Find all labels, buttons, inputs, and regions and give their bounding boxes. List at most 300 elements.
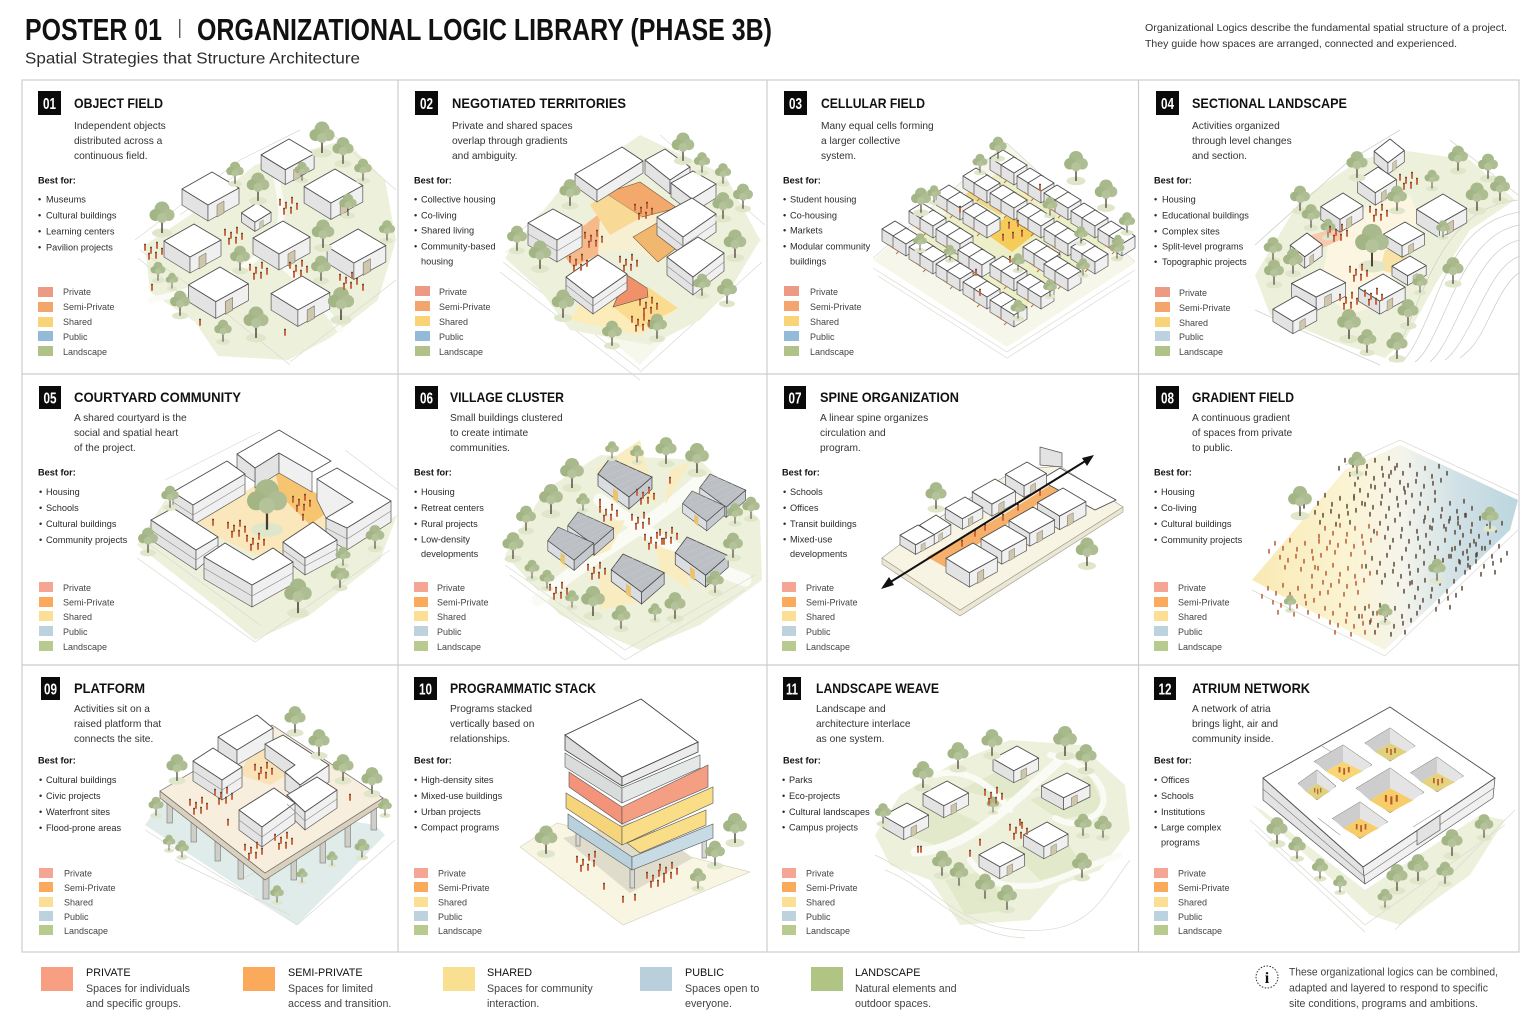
best for list: • bbox=[414, 503, 417, 513]
description: Private and shared spaces bbox=[452, 121, 573, 132]
legend: Semi-Private bbox=[437, 598, 489, 608]
panel: 01 object field bbox=[38, 91, 396, 365]
best for list: Best for: bbox=[782, 468, 820, 478]
best for list bbox=[414, 468, 484, 559]
panel: 08 gradient field bbox=[1154, 386, 1518, 656]
description: to public. bbox=[1192, 443, 1233, 454]
legend: Landscape bbox=[438, 926, 482, 936]
best for list: Mixed-use bbox=[790, 534, 832, 544]
description: of spaces from private bbox=[1192, 428, 1293, 439]
note text: These organizational logics can be combined, bbox=[1289, 966, 1498, 978]
legend: Shared bbox=[806, 898, 835, 908]
best for list: Community projects bbox=[1161, 535, 1243, 545]
best for list: • bbox=[39, 823, 42, 833]
best for list: • bbox=[783, 534, 786, 544]
legend: Private bbox=[806, 868, 834, 878]
best for list: Housing bbox=[46, 487, 80, 497]
description bbox=[1192, 121, 1292, 162]
best for list: • bbox=[782, 807, 785, 817]
legend: Private bbox=[64, 868, 92, 878]
legend: Public bbox=[437, 627, 462, 637]
description: Activities sit on a bbox=[74, 704, 150, 715]
bottom legend: landscape: LANDSCAPE bbox=[855, 967, 920, 979]
best for list: • bbox=[39, 807, 42, 817]
best for list: Compact programs bbox=[421, 822, 500, 832]
badge 09: 09 bbox=[44, 682, 57, 698]
legend: Shared bbox=[1179, 318, 1208, 328]
description: and ambiguity. bbox=[452, 151, 518, 162]
best for list: Best for: bbox=[38, 756, 76, 766]
best for list: • bbox=[414, 519, 417, 529]
heading: object field: OBJECT FIELD bbox=[74, 95, 163, 111]
best for list bbox=[38, 468, 128, 545]
description: vertically based on bbox=[450, 719, 534, 730]
best for list: Retreat centers bbox=[421, 503, 484, 513]
legend: Private bbox=[439, 287, 467, 297]
intro text bbox=[1145, 23, 1507, 50]
description: community inside. bbox=[1192, 734, 1274, 745]
intro text: Organizational Logics describe the fundamental spatial structure of a project. bbox=[1145, 23, 1507, 34]
legend: Landscape bbox=[810, 347, 854, 357]
best for list: Best for: bbox=[1154, 468, 1192, 478]
description bbox=[450, 704, 534, 745]
legend: Shared bbox=[439, 317, 468, 327]
legend: Private bbox=[1178, 868, 1206, 878]
legend: Shared bbox=[64, 898, 93, 908]
legend: Public bbox=[1178, 627, 1203, 637]
best for list bbox=[414, 756, 503, 832]
legend: Landscape bbox=[63, 347, 107, 357]
bottom legend: semi-private bbox=[243, 967, 391, 1010]
best for list: • bbox=[1154, 519, 1157, 529]
best for list: Learning centers bbox=[46, 226, 115, 236]
best for list: Modular community bbox=[790, 242, 871, 252]
legend: Landscape bbox=[437, 642, 481, 652]
legend: Semi-Private bbox=[438, 883, 490, 893]
description: relationships. bbox=[450, 734, 510, 745]
heading: spine organization: SPINE ORGANIZATION bbox=[820, 389, 959, 405]
description: Landscape and bbox=[816, 704, 886, 715]
badge 03 bbox=[784, 91, 807, 115]
bottom legend: semi-private: Spaces for limited bbox=[288, 983, 373, 995]
badge 04: 04 bbox=[1161, 96, 1174, 113]
badge 10 bbox=[414, 677, 437, 700]
legend: Semi-Private bbox=[806, 598, 858, 608]
best for list: Best for: bbox=[38, 468, 76, 478]
best for list bbox=[783, 176, 871, 266]
best for list: Co-housing bbox=[790, 210, 837, 220]
best for list: Student housing bbox=[790, 194, 856, 204]
intro text: They guide how spaces are arranged, connected and experienced. bbox=[1145, 39, 1457, 50]
best for list: Parks bbox=[789, 775, 813, 785]
description: of the project. bbox=[74, 443, 136, 454]
description bbox=[74, 704, 161, 745]
legend: Landscape bbox=[1179, 347, 1223, 357]
best for list: • bbox=[1154, 791, 1157, 801]
legend: Private bbox=[1178, 583, 1206, 593]
legend bbox=[782, 582, 858, 652]
legend: Landscape bbox=[439, 347, 483, 357]
best for list: Cultural landscapes bbox=[789, 807, 870, 817]
badge 10: 10 bbox=[419, 682, 432, 698]
description: brings light, air and bbox=[1192, 719, 1278, 730]
description: Many equal cells forming bbox=[821, 121, 934, 132]
description: Programs stacked bbox=[450, 704, 532, 715]
legend bbox=[784, 286, 862, 357]
legend: Shared bbox=[63, 317, 92, 327]
icon: info: i bbox=[1265, 970, 1270, 987]
description: through level changes bbox=[1192, 136, 1292, 147]
legend: Semi-Private bbox=[1179, 303, 1231, 313]
panel: 12 atrium network bbox=[1154, 677, 1515, 936]
best for list: Cultural buildings bbox=[46, 775, 117, 785]
best for list: • bbox=[414, 242, 417, 252]
description: to create intimate bbox=[450, 428, 528, 439]
bottom legend: shared: Spaces for community bbox=[487, 983, 593, 995]
illustration: village cluster bbox=[502, 437, 762, 660]
best for list: • bbox=[783, 210, 786, 220]
best for list: Best for: bbox=[1154, 756, 1192, 766]
legend: Semi-Private bbox=[810, 302, 862, 312]
panel: 03 cellular field bbox=[783, 91, 1135, 358]
best for list: Urban projects bbox=[421, 807, 481, 817]
legend bbox=[39, 868, 116, 936]
best for list: Best for: bbox=[414, 468, 452, 478]
legend: Semi-Private bbox=[63, 598, 115, 608]
panel: 04 sectional landscape bbox=[1154, 91, 1520, 365]
heading: atrium network: ATRIUM NETWORK bbox=[1192, 680, 1310, 696]
legend: Private bbox=[810, 287, 838, 297]
best for list bbox=[38, 756, 121, 833]
description: A linear spine organizes bbox=[820, 413, 928, 424]
legend bbox=[414, 868, 490, 936]
best for list: • bbox=[1154, 194, 1157, 204]
best for list: • bbox=[39, 535, 42, 545]
description bbox=[74, 121, 166, 162]
description: Independent objects bbox=[74, 121, 166, 132]
best for list: • bbox=[783, 194, 786, 204]
bottom legend: private: Spaces for individuals bbox=[86, 983, 190, 995]
best for list: • bbox=[1154, 822, 1157, 832]
best for list: Split-level programs bbox=[1162, 242, 1244, 252]
best for list: • bbox=[414, 194, 417, 204]
best for list: Housing bbox=[1161, 487, 1195, 497]
illustration: sectional landscape bbox=[1255, 130, 1520, 365]
description: distributed across a bbox=[74, 136, 163, 147]
legend: Public bbox=[439, 332, 464, 342]
best for list bbox=[782, 468, 857, 559]
legend bbox=[38, 287, 115, 357]
bottom legend: landscape: Natural elements and bbox=[855, 983, 957, 995]
best for list: • bbox=[1154, 226, 1157, 236]
panel: 11 landscape weave bbox=[782, 677, 1130, 938]
legend bbox=[415, 286, 491, 357]
best for list bbox=[782, 756, 870, 832]
legend: Landscape bbox=[1178, 926, 1222, 936]
note text: adapted and layered to respond to specific bbox=[1289, 982, 1489, 994]
description: circulation and bbox=[820, 428, 886, 439]
best for list: • bbox=[782, 775, 785, 785]
best for list: Offices bbox=[790, 503, 819, 513]
badge 12: 12 bbox=[1158, 682, 1172, 698]
description: A shared courtyard is the bbox=[74, 413, 187, 424]
legend: Semi-Private bbox=[1178, 883, 1230, 893]
legend: Private bbox=[437, 583, 465, 593]
best for list: Co-living bbox=[1161, 503, 1197, 513]
panel: 02 negotiated territories bbox=[414, 91, 765, 380]
bottom legend: private: PRIVATE bbox=[86, 967, 131, 979]
bottom legend: shared: SHARED bbox=[487, 967, 532, 979]
legend bbox=[782, 868, 858, 936]
legend: Private bbox=[1179, 288, 1207, 298]
best for list: Rural projects bbox=[421, 519, 478, 529]
panel: 09 platform bbox=[38, 677, 395, 936]
best for list: • bbox=[414, 807, 417, 817]
best for list: Museums bbox=[46, 194, 86, 204]
best for list: Collective housing bbox=[421, 194, 496, 204]
legend bbox=[414, 582, 489, 652]
description: a larger collective bbox=[821, 136, 901, 147]
heading: gradient field: GRADIENT FIELD bbox=[1192, 389, 1294, 405]
description bbox=[1192, 704, 1278, 745]
best for list: • bbox=[1154, 210, 1157, 220]
best for list: Best for: bbox=[1154, 176, 1192, 186]
best for list: • bbox=[39, 519, 42, 529]
illustration: object field bbox=[135, 122, 396, 365]
best for list: • bbox=[1154, 503, 1157, 513]
bottom legend: shared bbox=[443, 967, 593, 1010]
illustration: spine organization bbox=[881, 447, 1123, 616]
legend: Shared bbox=[810, 317, 839, 327]
badge 07 bbox=[784, 386, 806, 409]
best for list: • bbox=[1154, 242, 1157, 252]
best for list: developments bbox=[790, 549, 848, 559]
best for list: Cultural buildings bbox=[46, 519, 117, 529]
badge 03: 03 bbox=[789, 96, 802, 113]
best for list: Housing bbox=[1162, 194, 1196, 204]
best for list: • bbox=[1154, 535, 1157, 545]
legend: Landscape bbox=[806, 642, 850, 652]
title: ORGANIZATIONAL LOGIC LIBRARY (PHASE 3B) bbox=[197, 12, 772, 47]
badge 12 bbox=[1154, 677, 1176, 700]
best for list: Complex sites bbox=[1162, 226, 1220, 236]
icon: info bbox=[1256, 966, 1278, 988]
subtitle: Spatial Strategies that Structure Architecture bbox=[25, 50, 360, 68]
legend: Public bbox=[810, 332, 835, 342]
best for list: Civic projects bbox=[46, 791, 101, 801]
best for list: • bbox=[38, 242, 41, 252]
illustration: cellular field bbox=[873, 137, 1135, 358]
illustration: platform bbox=[145, 706, 395, 925]
legend: Shared bbox=[1178, 898, 1207, 908]
illustration: landscape weave bbox=[875, 726, 1130, 938]
badge 02: 02 bbox=[420, 96, 433, 113]
best for list: • bbox=[414, 822, 417, 832]
illustration: atrium network bbox=[1250, 707, 1515, 932]
best for list: • bbox=[1154, 487, 1157, 497]
best for list: Mixed-use buildings bbox=[421, 791, 503, 801]
legend: Semi-Private bbox=[1178, 598, 1230, 608]
panel: 06 village cluster bbox=[414, 386, 762, 660]
description bbox=[820, 413, 928, 454]
illustration: negotiated territories bbox=[500, 133, 765, 380]
best for list: programs bbox=[1161, 838, 1200, 848]
description: system. bbox=[821, 151, 856, 162]
best for list: Flood-prone areas bbox=[46, 823, 121, 833]
best for list: Institutions bbox=[1161, 807, 1205, 817]
best for list: • bbox=[783, 487, 786, 497]
heading: platform: PLATFORM bbox=[74, 680, 145, 696]
legend: Semi-Private bbox=[439, 302, 491, 312]
note text: site conditions, programs and ambitions. bbox=[1289, 998, 1478, 1010]
best for list: Housing bbox=[421, 487, 455, 497]
legend: Public bbox=[63, 332, 88, 342]
bottom legend: semi-private: access and transition. bbox=[288, 998, 391, 1010]
legend: Public bbox=[806, 627, 831, 637]
best for list: • bbox=[783, 503, 786, 513]
best for list bbox=[1154, 468, 1243, 545]
best for list: Pavilion projects bbox=[46, 242, 113, 252]
description: raised platform that bbox=[74, 719, 161, 730]
best for list: Transit buildings bbox=[790, 519, 857, 529]
legend: Shared bbox=[806, 612, 835, 622]
legend: Public bbox=[806, 912, 831, 922]
best for list: • bbox=[414, 791, 417, 801]
heading: programmatic stack: PROGRAMMATIC STACK bbox=[450, 680, 596, 696]
legend: Public bbox=[1178, 912, 1203, 922]
description bbox=[450, 413, 563, 454]
best for list bbox=[1154, 176, 1249, 267]
best for list: housing bbox=[421, 256, 453, 266]
description bbox=[821, 121, 934, 162]
best for list: • bbox=[783, 519, 786, 529]
badge 01: 01 bbox=[43, 96, 56, 113]
best for list: • bbox=[38, 194, 41, 204]
legend: Landscape bbox=[806, 926, 850, 936]
best for list: • bbox=[414, 487, 417, 497]
bottom legend: private: and specific groups. bbox=[86, 998, 181, 1010]
best for list: Educational buildings bbox=[1162, 210, 1249, 220]
best for list: • bbox=[782, 791, 785, 801]
description: A continuous gradient bbox=[1192, 413, 1290, 424]
best for list: • bbox=[414, 226, 417, 236]
bottom legend: shared: interaction. bbox=[487, 998, 539, 1010]
legend: Semi-Private bbox=[64, 883, 116, 893]
legend: Semi-Private bbox=[806, 883, 858, 893]
badge 11 bbox=[783, 677, 801, 700]
best for list: • bbox=[39, 775, 42, 785]
best for list bbox=[414, 176, 496, 266]
illustration: courtyard community bbox=[137, 430, 398, 642]
bottom legend: public: everyone. bbox=[685, 998, 732, 1010]
best for list: • bbox=[783, 242, 786, 252]
heading: village cluster: VILLAGE CLUSTER bbox=[450, 389, 564, 405]
description: continuous field. bbox=[74, 151, 148, 162]
badge 09 bbox=[41, 677, 60, 700]
badge 06 bbox=[415, 386, 438, 409]
description: Activities organized bbox=[1192, 121, 1280, 132]
description: Small buildings clustered bbox=[450, 413, 563, 424]
panel: 07 spine organization bbox=[782, 386, 1123, 652]
badge 08: 08 bbox=[1161, 390, 1174, 408]
legend bbox=[1155, 287, 1231, 357]
legend: Landscape bbox=[64, 926, 108, 936]
best for list: • bbox=[38, 210, 41, 220]
best for list: • bbox=[414, 210, 417, 220]
best for list: • bbox=[39, 791, 42, 801]
best for list: Schools bbox=[46, 503, 79, 513]
best for list: Offices bbox=[1161, 775, 1190, 785]
best for list: Co-living bbox=[421, 210, 457, 220]
best for list: • bbox=[1154, 257, 1157, 267]
heading: cellular field: CELLULAR FIELD bbox=[821, 95, 925, 111]
description: as one system. bbox=[816, 734, 885, 745]
best for list: Community projects bbox=[46, 535, 128, 545]
description: architecture interlace bbox=[816, 719, 911, 730]
description: A network of atria bbox=[1192, 704, 1271, 715]
illustration: gradient field bbox=[1252, 440, 1518, 656]
title bbox=[25, 12, 772, 47]
bottom legend: public: Spaces open to bbox=[685, 983, 759, 995]
badge 05 bbox=[39, 386, 61, 409]
best for list: • bbox=[38, 226, 41, 236]
legend: Shared bbox=[1178, 612, 1207, 622]
heading: negotiated territories: NEGOTIATED TERRITORIES bbox=[452, 95, 626, 111]
legend: Semi-Private bbox=[63, 302, 115, 312]
description bbox=[452, 121, 573, 162]
legend: Public bbox=[63, 627, 88, 637]
badge 02 bbox=[415, 91, 438, 115]
description bbox=[816, 704, 911, 745]
best for list: developments bbox=[421, 549, 479, 559]
badge 04 bbox=[1156, 91, 1179, 115]
legend bbox=[1154, 868, 1230, 936]
note text bbox=[1289, 966, 1498, 1010]
best for list: Cultural buildings bbox=[46, 210, 117, 220]
heading: courtyard community: COURTYARD COMMUNITY bbox=[74, 389, 242, 405]
best for list: Best for: bbox=[783, 756, 821, 766]
best for list: Eco-projects bbox=[789, 791, 840, 801]
best for list: • bbox=[1154, 775, 1157, 785]
best for list: Best for: bbox=[414, 176, 452, 186]
legend: Public bbox=[1179, 332, 1204, 342]
badge 05: 05 bbox=[44, 390, 57, 408]
title: POSTER 01 bbox=[25, 12, 162, 47]
best for list: Cultural buildings bbox=[1161, 519, 1232, 529]
legend: Private bbox=[806, 583, 834, 593]
legend: Private bbox=[438, 868, 466, 878]
best for list: Shared living bbox=[421, 226, 474, 236]
best for list: Large complex bbox=[1161, 822, 1222, 832]
best for list: • bbox=[414, 534, 417, 544]
description: overlap through gradients bbox=[452, 136, 568, 147]
legend: Shared bbox=[63, 612, 92, 622]
best for list: High-density sites bbox=[421, 775, 494, 785]
best for list: • bbox=[782, 822, 785, 832]
best for list: Schools bbox=[790, 487, 823, 497]
best for list: Low-density bbox=[421, 534, 470, 544]
best for list: • bbox=[1154, 807, 1157, 817]
description bbox=[1192, 413, 1293, 454]
badge 08 bbox=[1156, 386, 1179, 409]
description: connects the site. bbox=[74, 734, 153, 745]
best for list: • bbox=[39, 503, 42, 513]
description: program. bbox=[820, 443, 861, 454]
best for list: Best for: bbox=[783, 176, 821, 186]
legend: Shared bbox=[438, 898, 467, 908]
legend bbox=[39, 582, 115, 652]
badge 06: 06 bbox=[420, 390, 433, 408]
